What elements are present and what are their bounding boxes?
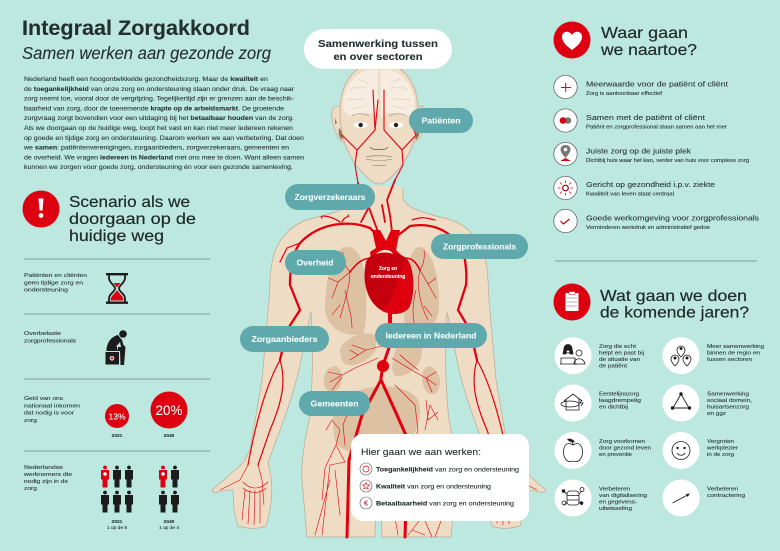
- chart: 20 percent circle: [150, 392, 188, 439]
- item: kwaliteit: Kwaliteit van zorg en ondersteuning: [376, 484, 492, 490]
- action: zorg die past: de patiënt: [599, 364, 627, 370]
- stakeholder pill: Zorgaanbieders: [240, 326, 329, 352]
- intro text block: we samen : patiëntenverenigingen, zorgaanbieders, zorgverzekeraars, gemeenten en: [23, 145, 290, 152]
- action: zorg die past: Zorg die echt: [599, 344, 636, 350]
- panel: hier gaan we aan werken: [351, 434, 529, 521]
- action: zorg die past: de situatie van: [599, 357, 640, 363]
- item: kwaliteit: [360, 480, 492, 492]
- action: digitalisering: uitwisseling: [599, 506, 632, 512]
- icon: exclamation mark: [22, 190, 60, 228]
- item: betaalbaarheid: [360, 497, 515, 509]
- chart: people 2021, 1 in 5: [101, 466, 133, 531]
- action: eerstelijnszorg: [554, 384, 641, 422]
- scenario item: income text: dat nodig is voor: [24, 410, 74, 416]
- icon: exhausted person: [106, 330, 127, 365]
- chart: 20 percent circle: 2040: [164, 433, 175, 439]
- icon: hourglass: [106, 273, 128, 304]
- intro text block: de toegankelijkheid van onze zorg en ondersteuning staan onder druk. De vraag naar: [24, 86, 294, 93]
- action: werkplezier: werkplezier: [706, 446, 738, 452]
- intro text block: [23, 76, 305, 171]
- action: werkplezier: Vergroten: [707, 439, 734, 445]
- goal: juiste plek: [554, 142, 749, 166]
- action: samenwerking sociaal domein: huisartsenzorg: [707, 404, 749, 410]
- action: digitalisering: Verbeteren: [599, 486, 630, 492]
- heart: [364, 230, 413, 314]
- action: zorg voorkomen: en preventie: [599, 452, 632, 458]
- action: eerstelijnszorg: Eerstelijnszorg: [599, 392, 639, 398]
- stakeholder pill: Zorgprofessionals: Zorgprofessionals: [443, 242, 516, 252]
- action: zorg die past: [554, 337, 644, 374]
- intro text block: zorg neemt toe, vooral door de vergrijzing. Tegelijkertijd zijn er grenzen aan de beschik-: [24, 96, 294, 103]
- intro text block: Als we doorgaan op de huidige weg, loopt het vast en kan niet meer iedereen rekenen: [24, 125, 294, 132]
- organs: [324, 247, 440, 454]
- scenario item: care delay text: ondersteuning: [24, 288, 68, 294]
- action: zorg voorkomen: door gezond leven: [599, 446, 651, 452]
- goal: werkomgeving: [554, 209, 759, 233]
- heading: de komende jaren?: [600, 304, 749, 322]
- intro text block: zorgvraag zorgt bovendien voor een uitdaging bij het betaalbaar houden van de zorg.: [24, 115, 294, 122]
- item: betaalbaarheid: €: [364, 500, 368, 508]
- scenario item: overworked text: Overbelaste: [24, 331, 61, 337]
- action: samenwerking regio: binnen de regio en: [707, 350, 760, 356]
- action: samenwerking regio: tussen sectoren: [707, 357, 752, 363]
- stakeholder pill: Iedereen in Nederland: Iedereen in Nederland: [386, 330, 476, 340]
- goal: werkomgeving: Goede werkomgeving voor zorgprofessionals: [586, 214, 759, 222]
- scenario item: care delay text: geen tijdige zorg en: [24, 280, 83, 286]
- item: toegankelijkheid: [360, 463, 520, 475]
- action: samenwerking sociaal domein: [662, 384, 752, 422]
- action: zorg die past: helpt en past bij: [599, 350, 644, 356]
- callout: samenwerking: en over sectoren: [334, 52, 422, 63]
- chart: people 2040, 1 in 4: 2040: [164, 519, 175, 525]
- stakeholder pill: Patiënten: Patiënten: [422, 116, 460, 126]
- scenario item: income text: Geld van ons: [24, 396, 63, 402]
- goal: juiste plek: Dichtbij huis waar het kan, verder van huis voor complexe zorg: [586, 158, 749, 164]
- stakeholder pill: Gemeenten: [299, 391, 370, 416]
- heading: Waar gaan: [601, 25, 688, 42]
- panel heading: Hier gaan we aan werken:: [361, 447, 481, 457]
- chart: people 2040, 1 in 4: 1 op de 4: [159, 525, 179, 531]
- icon: heart: [554, 22, 590, 58]
- stakeholder pill: Patiënten: [409, 108, 473, 133]
- stakeholder pill: Zorgverzekeraars: [285, 184, 375, 210]
- callout: samenwerking: Samenwerking tussen: [318, 39, 438, 50]
- brain: [343, 70, 415, 118]
- scenario item: income text: nationaal inkomen: [24, 403, 80, 409]
- chart: 20 percent circle: 20%: [155, 403, 183, 418]
- action: contractering: [662, 480, 745, 516]
- action: samenwerking sociaal domein: sociaal domein,: [707, 398, 752, 404]
- stakeholder pill: Zorgprofessionals: [431, 234, 528, 259]
- stakeholder pill: Overheid: [285, 250, 346, 275]
- stakeholder pill: Gemeenten: Gemeenten: [310, 398, 358, 408]
- action: samenwerking regio: [662, 337, 764, 374]
- intro text block: kunnen we zorgen voor goede zorg, ondersteuning én voor een gezonde samenleving.: [24, 164, 293, 171]
- action: digitalisering: van digitalisering: [599, 493, 647, 499]
- scenario heading: doorgaan op de: [69, 211, 196, 228]
- panel: scenario: [22, 190, 210, 531]
- action: eerstelijnszorg: en dichtbij: [599, 404, 628, 410]
- goal: gezondheid: Gericht op gezondheid i.p.v. ziekte: [586, 180, 715, 189]
- intro text block: op goede en tijdige zorg en ondersteuning. Daarom werken we aan verbetering. Dat doen: [24, 135, 305, 142]
- chart: people 2021, 1 in 5: 1 op de 5: [107, 525, 127, 531]
- stakeholder pill: Overheid: Overheid: [296, 258, 334, 268]
- stakeholder pill: Iedereen in Nederland: [375, 323, 487, 348]
- panel: waar gaan we naartoe: [554, 22, 759, 233]
- goal: werkomgeving: Verminderen werkdruk en administratief gedoe: [586, 225, 710, 231]
- stakeholder pill: Zorgverzekeraars: Zorgverzekeraars: [294, 192, 366, 202]
- scenario heading: Scenario als we: [69, 194, 190, 211]
- goal: gezondheid: Kwaliteit van leven staat centraal: [586, 192, 674, 198]
- action: werkplezier: [662, 432, 738, 469]
- action: zorg voorkomen: Zorg voorkomen: [599, 439, 645, 445]
- scenario item: workers text: Nederlandse: [24, 465, 63, 471]
- goal: meerwaarde: Zorg is aantoonbaar effectief: [586, 91, 663, 97]
- head: [332, 63, 426, 184]
- action: samenwerking sociaal domein: Samenwerking: [707, 392, 749, 398]
- action: eerstelijnszorg: laagdrempelig: [599, 398, 641, 404]
- scenario item: workers text: nodig zijn in de: [24, 479, 68, 485]
- subtitle: Samen werken aan gezonde zorg: [22, 43, 271, 63]
- goal: samen: Patiënt en zorgprofessional staan samen aan het roer: [586, 124, 727, 130]
- action: samenwerking sociaal domein: en ggz: [707, 411, 726, 417]
- goal: samen: [554, 109, 727, 132]
- body silhouette: [212, 190, 546, 537]
- action: werkplezier: in de zorg: [707, 452, 734, 458]
- scenario item: income text: zorg: [24, 418, 37, 424]
- intro text block: baarheid van zorg, door de toenemende krapte op de arbeidsmarkt . De groeiende: [24, 105, 285, 112]
- item: betaalbaarheid: Betaalbaarheid van zorg en ondersteuning: [376, 500, 515, 508]
- goal: meerwaarde: [554, 75, 729, 99]
- title: Integraal Zorgakkoord: [22, 17, 250, 40]
- stakeholder pill: Zorgaanbieders: Zorgaanbieders: [252, 334, 318, 344]
- goal: samen: Samen met de patiënt of cliënt: [586, 113, 706, 122]
- human body illustration: [212, 63, 546, 537]
- intro text block: Nederland heeft een hoogontwikkelde gezondheidszorg. Maar de kwaliteit en: [24, 76, 269, 83]
- scenario item: care delay text: Patiënten en cliënten: [24, 273, 87, 279]
- chart: people 2021, 1 in 5: 2021: [112, 519, 123, 525]
- scenario heading: huidige weg: [69, 228, 164, 245]
- goal: juiste plek: Juiste zorg op de juiste plek: [586, 146, 691, 156]
- callout: samenwerking: [304, 29, 452, 69]
- goal: gezondheid: [554, 176, 715, 200]
- action: digitalisering: en gegevens-: [599, 500, 637, 506]
- heart label: ondersteuning: [371, 274, 405, 280]
- scenario item: workers text: zorg: [24, 486, 37, 492]
- scenario item: overworked text: zorgprofessionals: [24, 338, 76, 344]
- action: contractering: contractering: [707, 493, 745, 499]
- action: samenwerking regio: Meer samenwerking: [707, 344, 764, 350]
- chart: 13 percent circle: 2021: [112, 433, 123, 439]
- heart label: Zorg en: [379, 266, 397, 272]
- action: zorg voorkomen: [554, 432, 651, 469]
- chart: 13 percent circle: [105, 404, 129, 439]
- intro text block: de overheid. We vragen iedereen in Nederland met ons mee te doen. Want alleen samen: [24, 154, 305, 161]
- chart: people 2040, 1 in 4: [159, 466, 179, 531]
- action: digitalisering: [554, 480, 647, 516]
- goal: meerwaarde: Meerwaarde voor de patiënt of cliënt: [586, 80, 729, 88]
- icon: clipboard: [554, 284, 590, 320]
- scenario item: workers text: werknemers die: [23, 472, 72, 478]
- heading: we naartoe?: [600, 42, 697, 59]
- panel: wat gaan we doen: [554, 284, 764, 516]
- arteries: [220, 90, 537, 537]
- heading: Wat gaan we doen: [600, 288, 747, 305]
- item: toegankelijkheid: Toegankelijkheid van zorg en ondersteuning: [376, 466, 520, 474]
- chart: 13 percent circle: 13%: [108, 412, 126, 422]
- action: contractering: Verbeteren: [707, 486, 738, 492]
